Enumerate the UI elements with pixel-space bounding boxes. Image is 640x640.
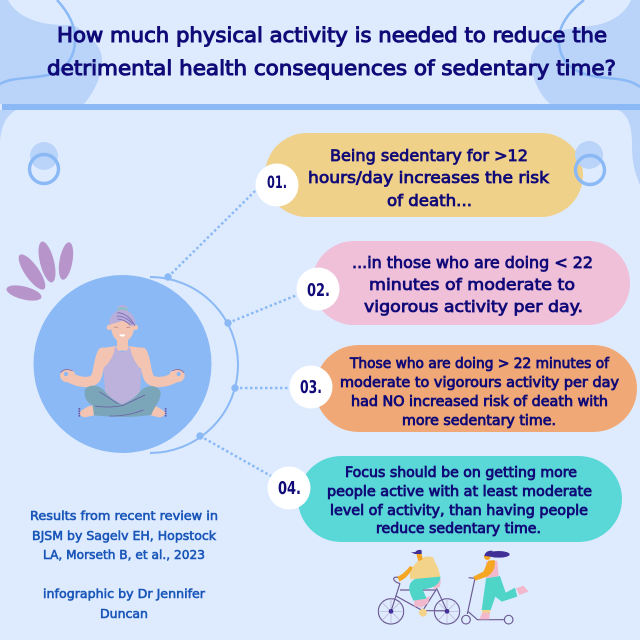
source and credit text: BJSM by Sagelv EH, Hopstock bbox=[32, 528, 217, 543]
panel: point 03 bbox=[290, 345, 637, 432]
panel: point 02: vigorous activity per day. bbox=[364, 297, 583, 316]
panel: point 01: Being sedentary for >12 bbox=[330, 146, 528, 165]
panel: point 03: moderate to vigorours activity per day bbox=[340, 375, 619, 391]
panel: point 03: Those who are doing > 22 minutes of bbox=[349, 356, 610, 372]
panel: point 01: 01. bbox=[267, 173, 287, 192]
source and credit text: Results from recent review in bbox=[30, 508, 218, 523]
panel: point 04 bbox=[268, 456, 622, 542]
icon: left ring decoration bbox=[30, 142, 58, 184]
panel: point 02: ...in those who are doing < 22 bbox=[352, 253, 593, 272]
title: detrimental health consequences of sedentary time? bbox=[47, 56, 616, 80]
source and credit text: LA, Morseth B, et al., 2023 bbox=[43, 547, 205, 562]
panel: point 04: level of activity, than having people bbox=[330, 503, 588, 519]
panel: point 04: 04. bbox=[278, 479, 301, 499]
panel: point 01: of death... bbox=[387, 191, 472, 210]
title bbox=[47, 23, 616, 80]
panel: point 03: more sedentary time. bbox=[402, 413, 556, 429]
source and credit text bbox=[30, 508, 218, 621]
panel: point 04: people active with at least moderate bbox=[327, 484, 592, 500]
panel: point 04: Focus should be on getting more bbox=[345, 465, 577, 481]
panel: point 02: minutes of moderate to bbox=[369, 275, 575, 294]
panel: point 03: 03. bbox=[300, 378, 322, 398]
icon: cyclist and scooter rider bbox=[378, 550, 529, 624]
icon: right ring decoration bbox=[575, 141, 604, 184]
title: How much physical activity is needed to reduce the bbox=[57, 23, 607, 47]
panel: point 03: had NO increased risk of death with bbox=[351, 394, 608, 410]
icon: meditating woman in blue circle bbox=[34, 275, 212, 453]
icon: purple petals bbox=[5, 240, 76, 304]
connector arc with dotted lines bbox=[150, 190, 297, 476]
panel: point 02 bbox=[296, 241, 630, 325]
panel: point 01 bbox=[256, 133, 583, 217]
panel: point 04: reduce sedentary time. bbox=[376, 521, 541, 537]
source and credit text: Duncan bbox=[100, 606, 148, 621]
panel: point 01: hours/day increases the risk bbox=[308, 168, 550, 187]
panel: point 02: 02. bbox=[307, 281, 330, 301]
source and credit text: infographic by Dr Jennifer bbox=[43, 586, 206, 601]
